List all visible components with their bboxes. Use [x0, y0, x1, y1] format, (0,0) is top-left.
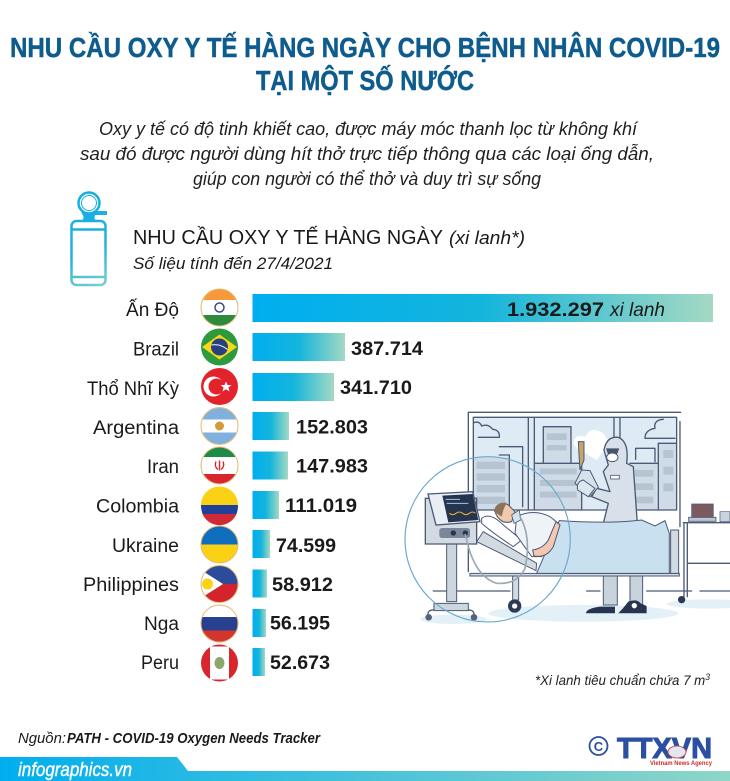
- icon: oxygen cylinder: [72, 192, 107, 285]
- row: Iran: Iran: [147, 457, 179, 478]
- row: Philippines: Philippines: [83, 575, 179, 596]
- row: Turkey: [87, 368, 412, 405]
- source: Nguồn:: [18, 730, 66, 747]
- row: Brazil: Brazil: [133, 340, 179, 360]
- intro text: Oxy y tế có độ tinh khiết cao, được máy móc thanh lọc từ không khí: [99, 118, 639, 139]
- window: [468, 412, 681, 572]
- chart heading: NHU CẦU OXY Y TẾ HÀNG NGÀY: [133, 226, 443, 249]
- row: Ukraine: Ukraine: [112, 536, 179, 557]
- footnote: *Xi lanh tiêu chuẩn chứa 7 m: [535, 672, 714, 688]
- bar chart: [83, 289, 713, 682]
- intro text: sau đó được người dùng hít thở trực tiếp thông qua các loại ống dẫn,: [80, 143, 654, 164]
- source: PATH - COVID-19 Oxygen Needs Tracker: [67, 730, 321, 747]
- row: Argentina: Argentina: [93, 418, 179, 439]
- title: [10, 32, 720, 96]
- intro text: [80, 118, 654, 189]
- row: Ukraine: [112, 526, 336, 563]
- row: Iran: [147, 447, 368, 484]
- blue circle: [405, 457, 570, 622]
- chart heading: [133, 226, 525, 273]
- row: Colombia: Colombia: [96, 496, 179, 518]
- intro text: giúp con người có thể thở và duy trì sự sống: [193, 168, 542, 189]
- logo: TTXVN: Vietnam News Agency: [650, 761, 713, 767]
- row: India: 1.932.297: [507, 299, 604, 321]
- ventilator machine: [425, 492, 480, 621]
- chart heading: Số liệu tính đến 27/4/2021: [133, 254, 333, 273]
- illustration: patient in hospital: [405, 412, 730, 624]
- row: Argentina: [93, 408, 368, 444]
- row: Brazil: 387.714: [351, 338, 423, 360]
- row: Russia: Nga: [144, 614, 179, 635]
- row: Turkey: Thổ Nhĩ Kỳ: [87, 379, 179, 400]
- hospital bed with patient: [465, 503, 679, 613]
- row: Philippines: 58.912: [272, 574, 333, 596]
- row: Peru: [141, 644, 330, 682]
- logo: TTXVN: C: [594, 739, 604, 754]
- row: Colombia: [96, 486, 357, 525]
- row: Argentina: 152.803: [296, 416, 368, 438]
- row: Peru: 52.673: [270, 652, 330, 674]
- row: Russia: 56.195: [270, 612, 330, 634]
- row: India: Ấn Độ: [126, 299, 179, 321]
- floor shadows: [420, 599, 730, 624]
- row: Turkey: 341.710: [340, 377, 412, 399]
- title: TẠI MỘT SỐ NƯỚC: [256, 64, 474, 96]
- row: Brazil: [133, 328, 423, 366]
- footer band: infographics.vn: [18, 760, 132, 781]
- row: India: xi lanh: [609, 300, 665, 321]
- logo: TTXVN: TTXVN: [617, 733, 712, 765]
- chart heading: (xi lanh*): [449, 228, 525, 248]
- row: Iran: 147.983: [296, 456, 368, 478]
- row: Philippines: [83, 566, 333, 602]
- row: Ukraine: 74.599: [276, 535, 336, 557]
- footer band: [0, 757, 730, 781]
- row: Colombia: 111.019: [285, 495, 357, 517]
- footnote: 3: [705, 672, 710, 682]
- row: Peru: Peru: [141, 653, 179, 674]
- row: Russia: [144, 605, 330, 642]
- instrument table: [678, 504, 730, 603]
- scientist in protective suit: [575, 437, 647, 613]
- row: India: [126, 289, 713, 326]
